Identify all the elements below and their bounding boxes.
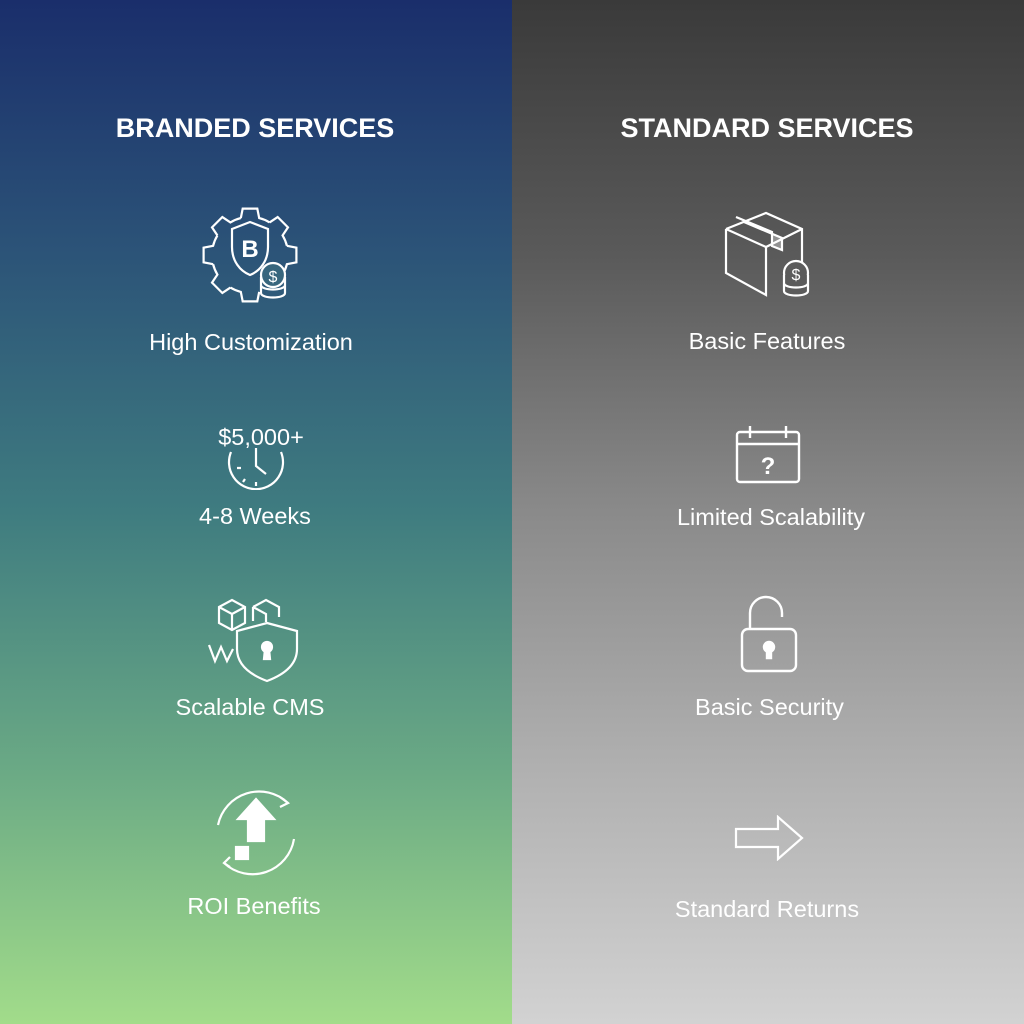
label: basic features: Basic Features	[689, 328, 845, 354]
icon: gear shield coins	[202, 208, 298, 302]
label: standard returns: Standard Returns	[675, 896, 859, 922]
label: price: $5,000+	[218, 424, 304, 450]
label: scalable cms: Scalable CMS	[176, 694, 324, 720]
panel: standard services	[512, 0, 1024, 1024]
icon: clock	[228, 448, 284, 490]
icon: roi arrow	[217, 790, 295, 876]
icon: unlocked padlock	[740, 596, 798, 672]
icon: cubes shield	[208, 598, 298, 682]
icon: gear shield coins: $	[269, 269, 278, 286]
label: basic security: Basic Security	[695, 694, 844, 720]
heading: standard: STANDARD SERVICES	[620, 113, 914, 143]
label: roi: ROI Benefits	[187, 893, 321, 919]
label: high customization: High Customization	[149, 329, 353, 355]
panel: branded services	[0, 0, 512, 1024]
icon: calendar	[736, 426, 800, 484]
icon: right arrow	[734, 815, 804, 861]
icon: calendar: ?	[761, 453, 775, 480]
label: weeks: 4-8 Weeks	[199, 503, 311, 529]
label: limited scalability: Limited Scalability	[677, 504, 865, 530]
icon: box coins: $	[792, 267, 801, 284]
heading: branded: BRANDED SERVICES	[116, 113, 394, 143]
icon: box coins	[724, 212, 810, 297]
icon: gear shield coins: B	[241, 236, 259, 263]
